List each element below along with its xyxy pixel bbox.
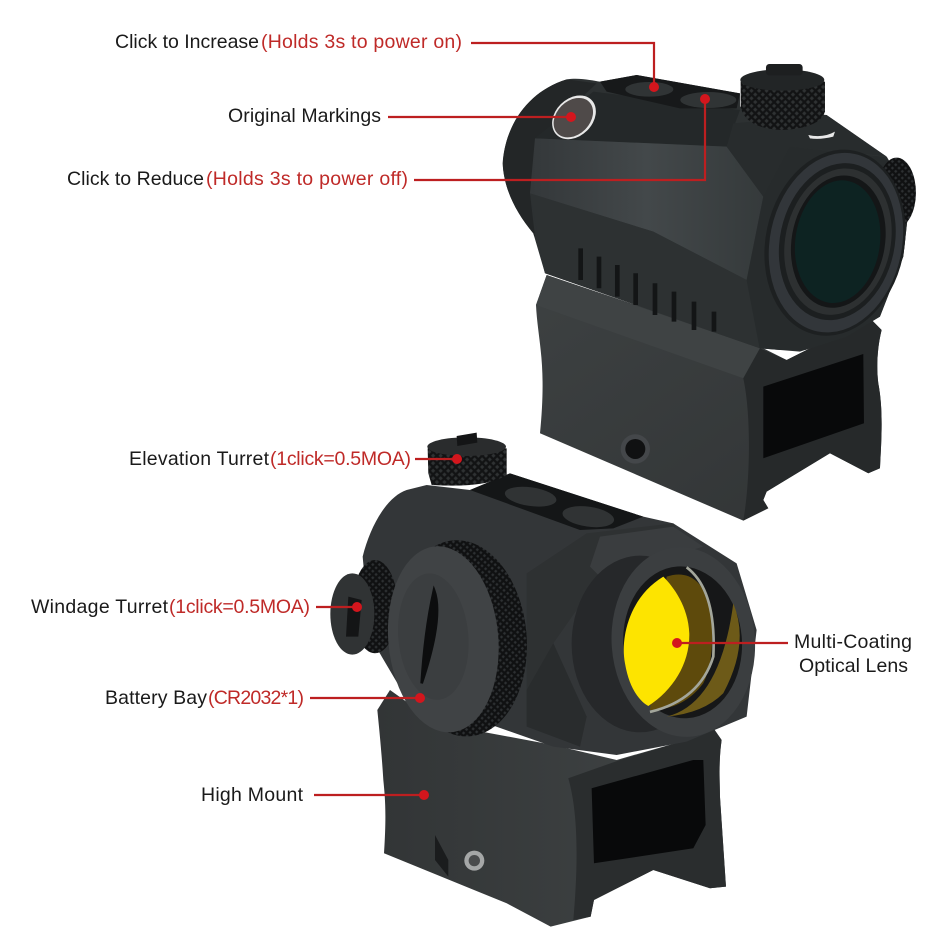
callout: elevation turret: (1click=0.5MOA) [270, 448, 411, 470]
callout: windage turret: Windage Turret [31, 596, 169, 618]
callout: high mount: High Mount [201, 784, 304, 806]
windage knob [877, 158, 916, 228]
front lens [748, 136, 922, 349]
elevation turret knob [427, 433, 507, 486]
bottom red dot sight product photo [330, 433, 761, 927]
callout: windage turret: (1click=0.5MOA) [169, 596, 310, 618]
callout: elevation turret [129, 448, 462, 470]
callout: original markings [228, 105, 576, 127]
top red dot sight product photo [500, 64, 922, 521]
callout: click to increase: (Holds 3s to power on) [261, 31, 462, 53]
callout: battery bay: (CR2032*1) [208, 687, 304, 709]
callout: click to reduce [67, 94, 710, 190]
multi-coating lens housing [572, 542, 761, 742]
callout: click to reduce: (Holds 3s to power off) [206, 168, 408, 190]
elevation turret [740, 64, 825, 130]
top sight body [500, 75, 913, 352]
battery bay cap [380, 535, 535, 742]
callout: windage turret [31, 596, 362, 618]
callout: elevation turret: Elevation Turret [129, 448, 270, 470]
callout: click to reduce: Click to Reduce [67, 168, 204, 190]
callout: battery bay: Battery Bay [105, 687, 207, 709]
callout: high mount [201, 784, 429, 806]
callout: click to increase: Click to Increase [115, 31, 259, 53]
callout: multi-coating optical lens: Multi-Coating [794, 631, 912, 653]
bottom mount [377, 690, 726, 927]
top mount [536, 275, 882, 521]
callout: multi-coating optical lens [672, 631, 912, 677]
original markings badge [543, 87, 605, 148]
callout: battery bay [105, 687, 425, 709]
callout: click to increase [115, 31, 659, 92]
windage turret knob [330, 560, 398, 655]
bottom sight body [363, 473, 757, 755]
callout: multi-coating optical lens: Optical Lens [799, 655, 908, 677]
callout: original markings: Original Markings [228, 105, 381, 127]
